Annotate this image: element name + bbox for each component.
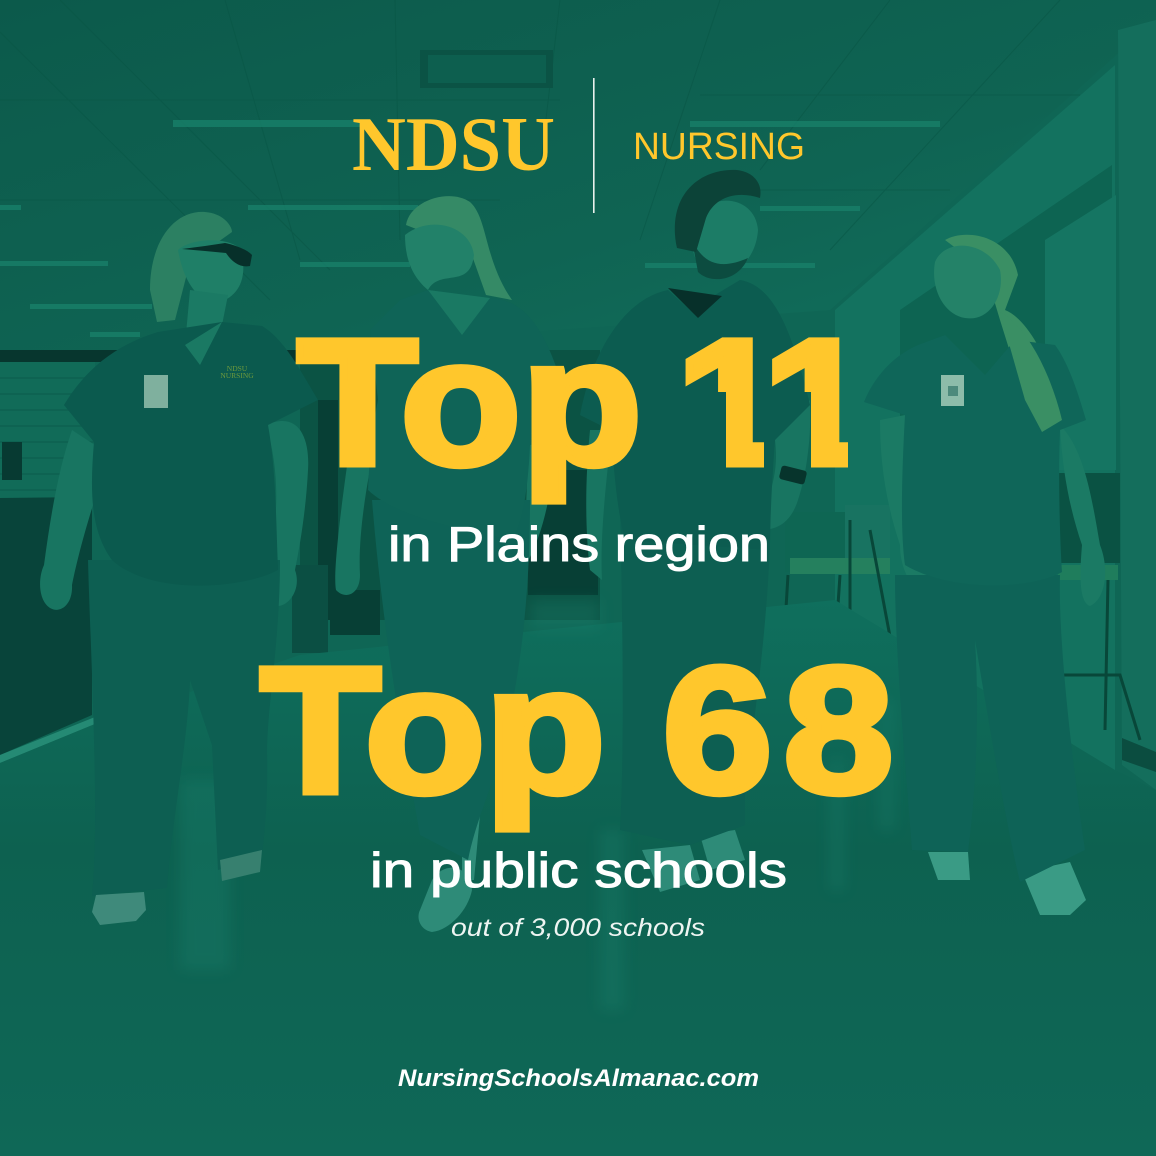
floor reflections	[180, 600, 894, 1010]
right vents	[888, 128, 1108, 290]
logo divider	[593, 78, 595, 213]
arms	[40, 421, 308, 610]
shirt	[580, 280, 810, 550]
pants	[88, 560, 280, 896]
subhead: in public schools: in public schools	[370, 844, 787, 898]
source URL: NursingSchoolsAlmanac.com	[398, 1065, 759, 1092]
pants	[895, 575, 1085, 882]
shirt	[864, 335, 1086, 585]
ceiling	[0, 0, 1156, 350]
person 1: NURSING	[220, 371, 254, 380]
center corridor back	[300, 350, 600, 620]
right wall and window	[835, 65, 1115, 1156]
person 2	[335, 196, 558, 932]
headline: Top 11: Top 11	[297, 302, 872, 502]
arms	[586, 400, 810, 580]
ceiling vent	[420, 50, 553, 88]
headline: Top 68: Top 68	[260, 630, 893, 830]
hair	[406, 196, 512, 300]
face	[690, 201, 758, 277]
back table and chairs	[1045, 473, 1120, 563]
ceiling lights	[0, 120, 940, 337]
arms	[335, 430, 556, 595]
hair and ponytail	[945, 235, 1062, 432]
shoes	[92, 892, 146, 925]
pants	[372, 500, 530, 860]
hair	[675, 170, 761, 252]
subhead: in Plains region: in Plains region	[388, 518, 770, 572]
neck and chest	[185, 290, 228, 345]
floor	[0, 600, 1156, 1156]
person 1: NDSU	[227, 364, 248, 373]
name tag	[144, 375, 168, 408]
hair	[150, 212, 232, 322]
arms	[880, 415, 1105, 606]
person 3	[580, 170, 810, 892]
person 1	[40, 212, 318, 925]
person 4	[864, 235, 1105, 915]
head	[178, 240, 243, 302]
glasses	[182, 243, 252, 266]
left wall band and brick	[0, 350, 300, 362]
logo: NDSU: NDSU	[352, 101, 555, 187]
shoes	[462, 815, 480, 880]
shirt	[368, 290, 558, 540]
note: out of 3,000 schools: out of 3,000 schools	[451, 914, 705, 942]
shoes	[642, 845, 700, 892]
shirt	[64, 322, 318, 586]
shoes	[928, 852, 970, 880]
logo: NURSING: NURSING	[633, 126, 805, 168]
pants	[620, 500, 770, 845]
left counter	[0, 497, 92, 755]
face	[934, 246, 1001, 318]
id badge	[941, 375, 964, 406]
face	[405, 225, 474, 290]
